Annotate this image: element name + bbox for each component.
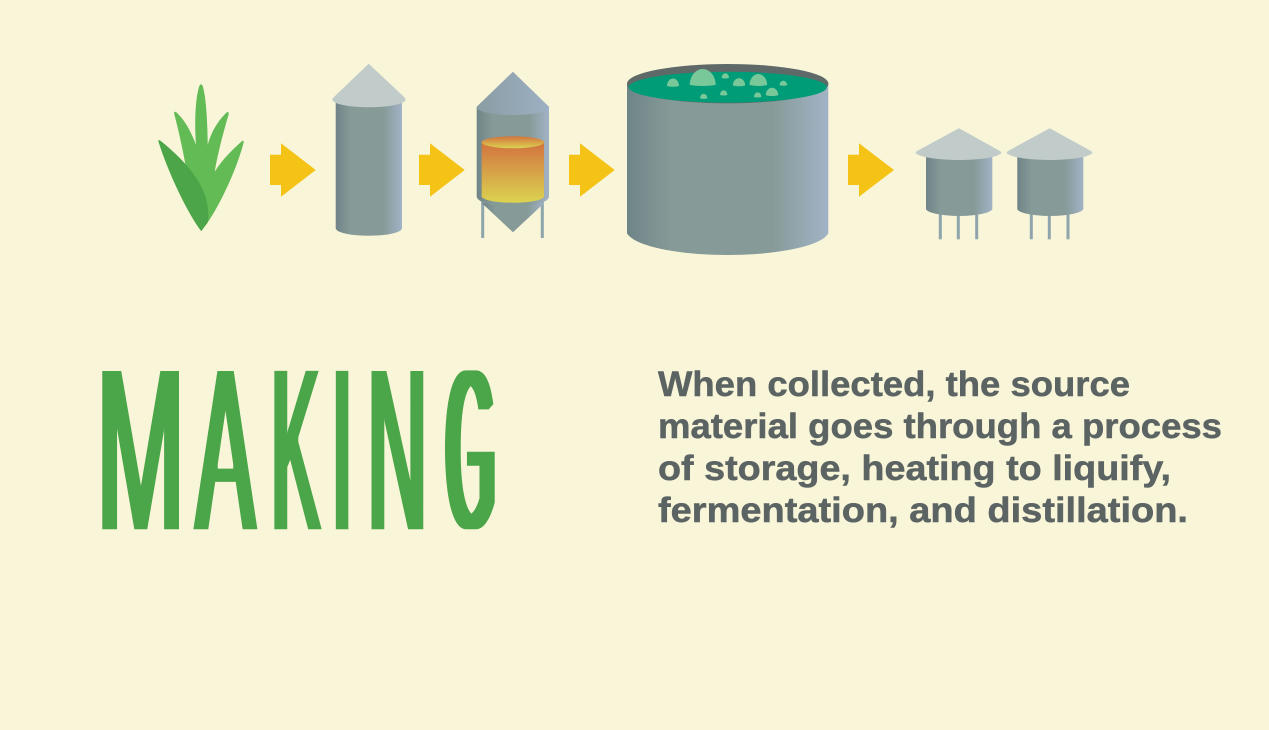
description text: of storage, heating to liquify, — [658, 449, 1171, 488]
icon: fermentation vat — [627, 64, 828, 255]
icon: green plant — [158, 84, 244, 231]
arrow 3 — [569, 143, 615, 197]
arrow 1 — [270, 143, 316, 197]
bubbles — [667, 69, 787, 99]
description text: When collected, the source — [658, 365, 1130, 404]
fermenting liquid — [629, 72, 827, 103]
title: MAKING: A — [196, 318, 255, 582]
tank body — [477, 107, 549, 207]
description text — [658, 365, 1222, 530]
description text: fermentation, and distillation. — [658, 491, 1188, 530]
icon: storage silo — [332, 64, 406, 236]
title: MAKING — [97, 317, 494, 583]
arrow 2 — [419, 143, 465, 197]
arrow 4 — [848, 143, 894, 197]
description text: material goes through a process — [658, 407, 1222, 446]
heated liquid — [482, 142, 544, 203]
icon: distillation silo left — [916, 128, 1001, 239]
title: MAKING: I — [331, 318, 353, 582]
title: MAKING: N — [368, 319, 427, 582]
icon: heating tank — [477, 72, 549, 238]
lower cone — [482, 203, 544, 232]
liquid surface — [482, 136, 544, 148]
title: MAKING: K — [271, 319, 321, 583]
icon: distillation silo right — [1007, 128, 1092, 239]
tank legs — [481, 200, 544, 238]
title: MAKING: M — [97, 317, 185, 582]
vat body — [627, 84, 828, 255]
vat rim — [627, 64, 828, 103]
upper cone — [477, 72, 549, 115]
title: MAKING: G — [447, 321, 494, 578]
